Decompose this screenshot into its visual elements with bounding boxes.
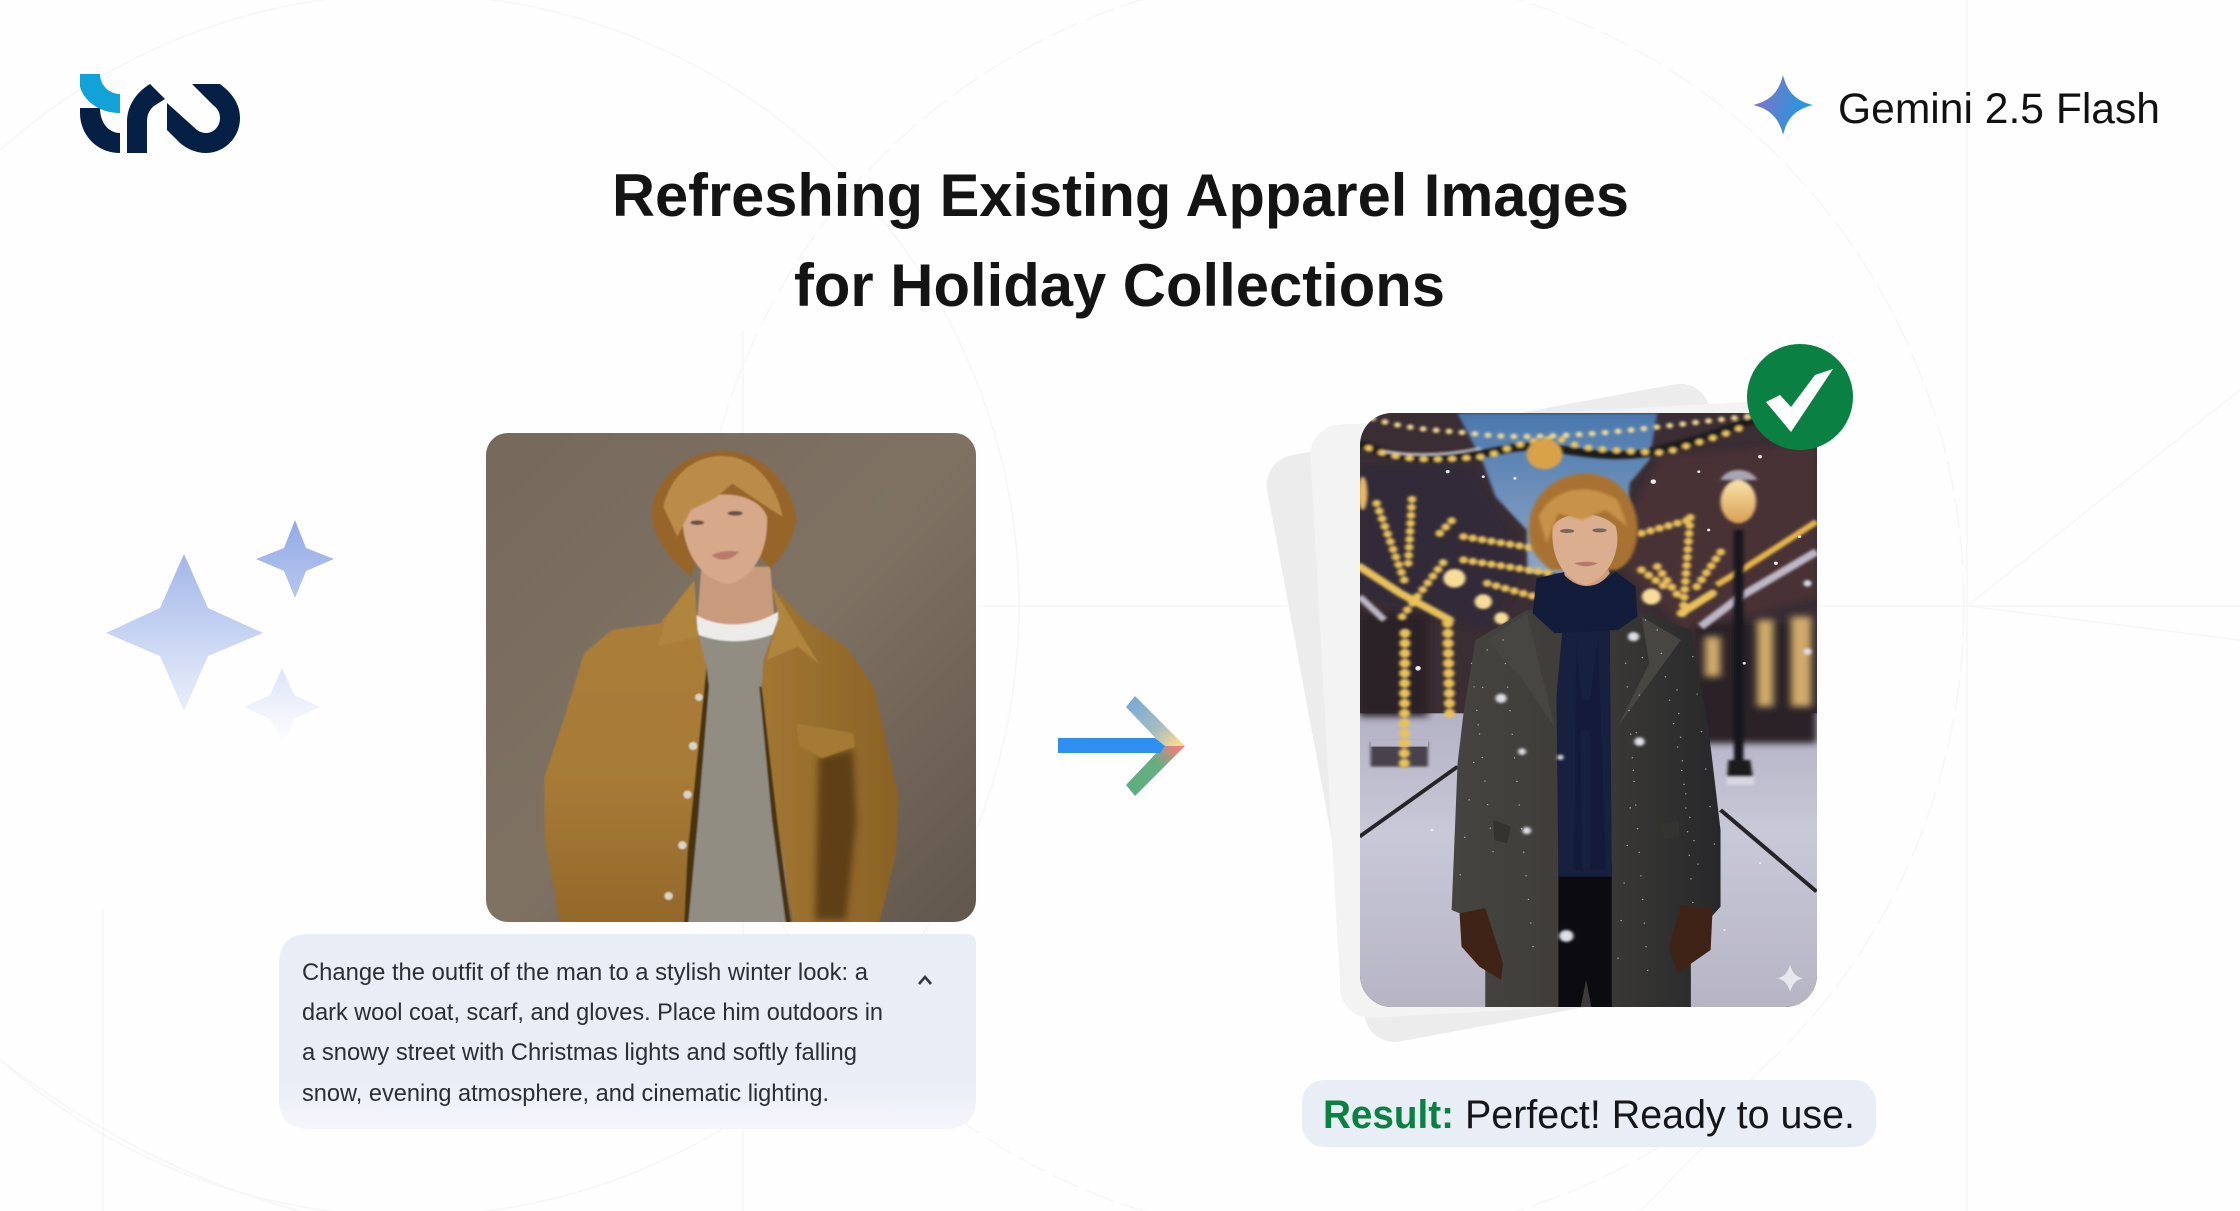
prompt text: Change the outfit of the man to a stylish winter look: a	[302, 959, 869, 986]
title: Refreshing Existing Apparel Images	[612, 162, 1629, 229]
result pill	[1302, 1080, 1876, 1147]
man: neck	[1564, 568, 1610, 586]
buttons	[664, 694, 703, 900]
man: hair	[1529, 473, 1638, 570]
icon: green check badge	[1747, 344, 1853, 450]
prompt text	[302, 959, 883, 1107]
falling snow	[1496, 580, 1811, 942]
buildings	[1360, 463, 1527, 630]
man: shirt	[1572, 630, 1598, 700]
photo: winter street result	[1358, 413, 1818, 1013]
prompt text: a snowy street with Christmas lights and softly falling	[302, 1039, 857, 1066]
prompt background	[279, 934, 976, 1129]
gemini badge	[1753, 75, 2160, 135]
man: gloves	[1460, 905, 1713, 980]
prompt text: snow, evening atmosphere, and cinematic lighting.	[302, 1080, 829, 1107]
title: for Holiday Collections	[794, 252, 1445, 319]
man: trousers	[1558, 863, 1612, 1010]
snow on coat	[1460, 620, 1717, 993]
back card	[1262, 379, 1813, 1047]
face	[682, 495, 767, 584]
icon: collapse chevron	[919, 977, 931, 984]
result label	[1302, 1080, 1876, 1147]
man: coat	[1452, 610, 1721, 1010]
curbs	[1360, 767, 1817, 892]
result image stack	[1262, 344, 1853, 1047]
garland	[1365, 416, 1752, 459]
ornament	[1526, 439, 1563, 469]
man: scarf	[1556, 630, 1612, 877]
icon: gemini star	[1753, 75, 1813, 135]
ground	[1360, 713, 1818, 1013]
bench	[1371, 742, 1428, 767]
logo mark: dark letters	[80, 84, 240, 153]
golden tree lights	[1360, 497, 1724, 763]
neck	[696, 566, 775, 626]
street lamps	[1358, 470, 1757, 785]
title	[612, 162, 1629, 319]
sweater	[681, 632, 791, 923]
result text: Result:	[1323, 1093, 1454, 1137]
hair fringe	[663, 456, 782, 537]
logo	[80, 74, 240, 153]
snowy awnings	[1717, 522, 1817, 585]
jacket	[544, 580, 707, 923]
arrow	[1058, 696, 1185, 796]
prompt text: dark wool coat, scarf, and gloves. Place him outdoors in	[302, 999, 883, 1026]
sky	[1458, 413, 1657, 573]
icon: decorative sparkles	[106, 520, 334, 745]
storefront glow	[1705, 617, 1811, 707]
watermark sparkle	[1777, 965, 1803, 992]
logo mark: cyan arc	[80, 74, 120, 113]
man: face	[1552, 514, 1617, 585]
middle card	[1309, 400, 1807, 1019]
hair back	[651, 451, 796, 577]
model name: Gemini 2.5 Flash	[1838, 85, 2160, 133]
t-shirt collar	[694, 612, 779, 642]
photo: original studio portrait	[486, 433, 976, 923]
eyes and mouth	[690, 511, 743, 525]
result label: Perfect! Ready to use.	[1465, 1093, 1855, 1137]
prompt box	[279, 934, 976, 1129]
